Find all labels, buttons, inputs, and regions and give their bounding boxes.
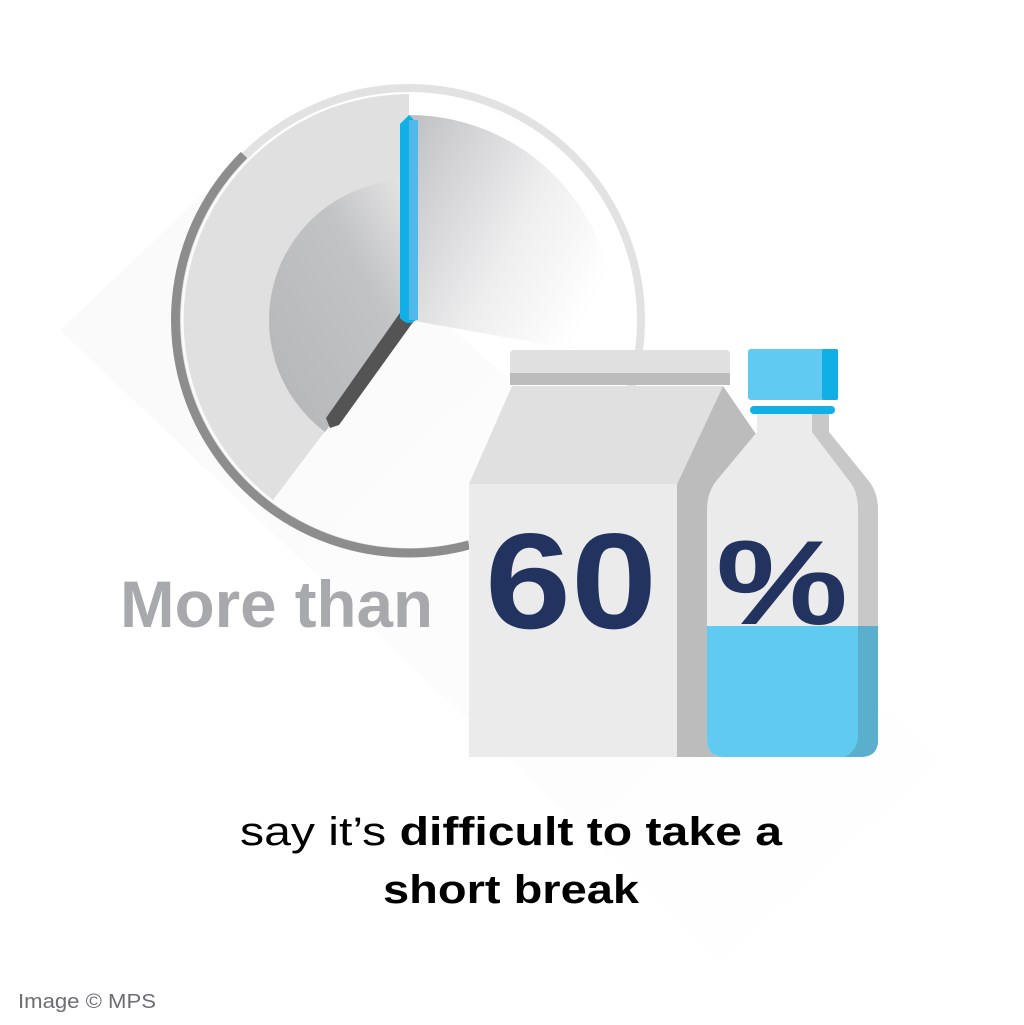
text: caption [240, 810, 783, 912]
text: caption: say it’s difficult to take a [240, 810, 783, 854]
text: 60: 60 [485, 505, 657, 657]
icon: clock [176, 88, 641, 553]
background shadow [60, 150, 940, 960]
text: More than: More than [120, 567, 433, 641]
text: caption: short break [383, 868, 640, 912]
text: credit: Image © MPS [18, 991, 156, 1013]
icon: carton [469, 350, 760, 757]
icon: bottle [707, 349, 878, 757]
text: %: % [716, 516, 848, 650]
